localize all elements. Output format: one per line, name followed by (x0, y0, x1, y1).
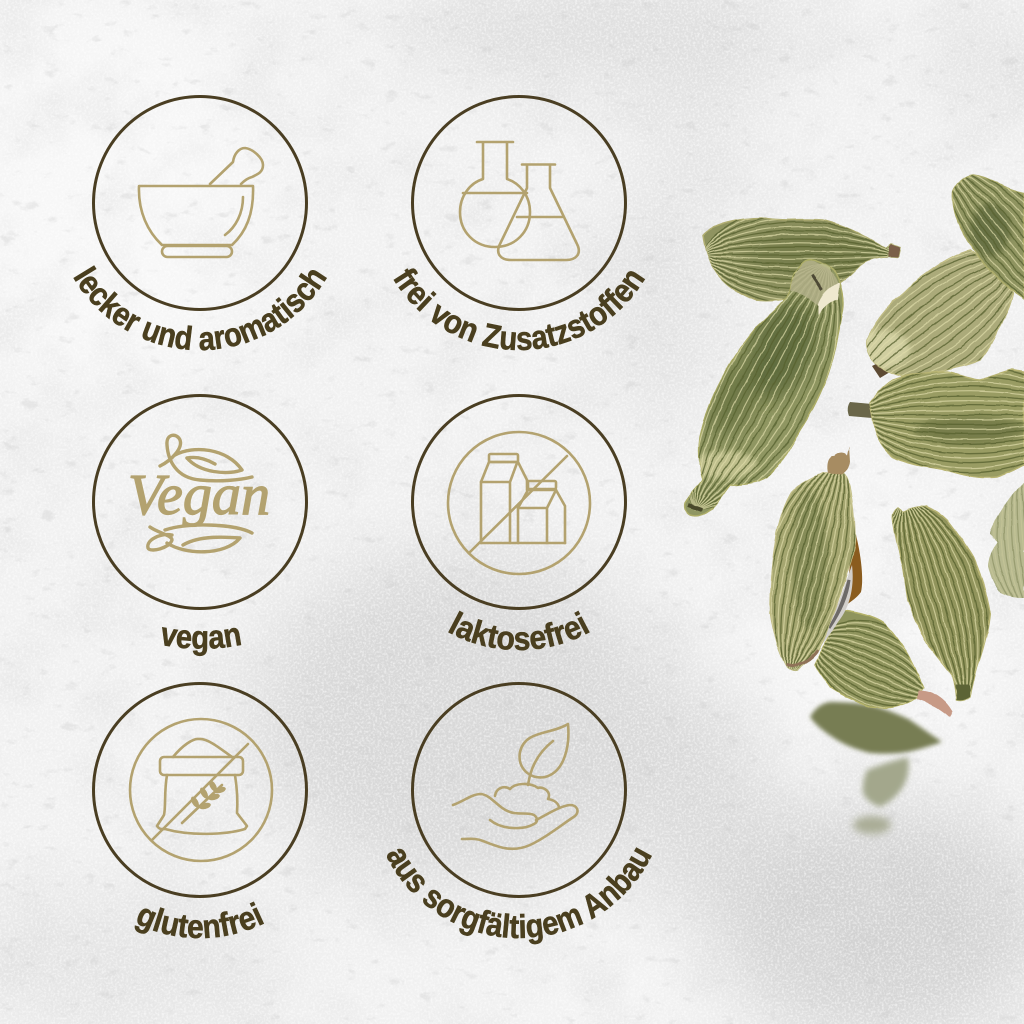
label (371, 790, 667, 938)
pod: upper right pale (866, 249, 1014, 376)
pod: lower left vertical (769, 446, 856, 672)
circle (94, 96, 306, 310)
label (53, 203, 347, 350)
icon: hand with seedling (453, 724, 577, 849)
cardamom pods (640, 132, 1024, 834)
blurred falling pod (810, 702, 942, 754)
pod: far right pale (988, 483, 1024, 598)
pod: centre right vertical (892, 505, 992, 702)
badge: frei von Zusatzstoffen: frei von Zusatzstoffen (394, 268, 646, 350)
pod: lower centre with pink stem (814, 610, 953, 717)
badge: glutenfrei (92, 682, 308, 938)
circle (412, 96, 626, 310)
badge: aus sorgfaeltigem Anbau (387, 682, 652, 944)
pod: large diagonal (684, 258, 844, 517)
badge: lecker und aromatisch: lecker und aromatisch (73, 265, 327, 351)
label (52, 790, 348, 938)
label (372, 203, 666, 350)
circle (412, 396, 626, 608)
circle (412, 684, 626, 896)
blurred small pod (863, 757, 909, 807)
icon: mortar and pestle (139, 148, 263, 257)
blurred distant pod (853, 816, 891, 834)
badge: lecker und aromatisch (73, 95, 327, 351)
badge: laktosefrei: laktosefrei (448, 610, 590, 650)
pod: upper right stub (872, 362, 890, 378)
label (101, 622, 301, 649)
pod: middle right stem (848, 402, 872, 418)
label (371, 502, 667, 650)
icon: vegan lettering with leaves: Vegan (128, 462, 270, 527)
pod: top right corner (952, 174, 1024, 300)
icon: no milk cartons (448, 432, 590, 574)
pod: split open husk and seeds (812, 535, 862, 655)
badge: aus sorgfaeltigem Anbau: aus sorgfältigem Anbau (387, 847, 652, 944)
badge: laktosefrei (411, 394, 627, 650)
icon: no flour sack (130, 719, 272, 861)
badge: vegan: vegan (162, 627, 242, 656)
badge: frei von Zusatzstoffen (394, 95, 646, 350)
circle (94, 396, 306, 608)
icon: laboratory flasks (460, 142, 579, 260)
circle (94, 684, 306, 896)
icon: vegan lettering with leaves (128, 435, 270, 552)
badge: vegan (92, 394, 308, 656)
pod: top left (702, 217, 901, 302)
badge: glutenfrei: glutenfrei (134, 902, 264, 938)
pod: middle right horizontal (869, 368, 1024, 478)
